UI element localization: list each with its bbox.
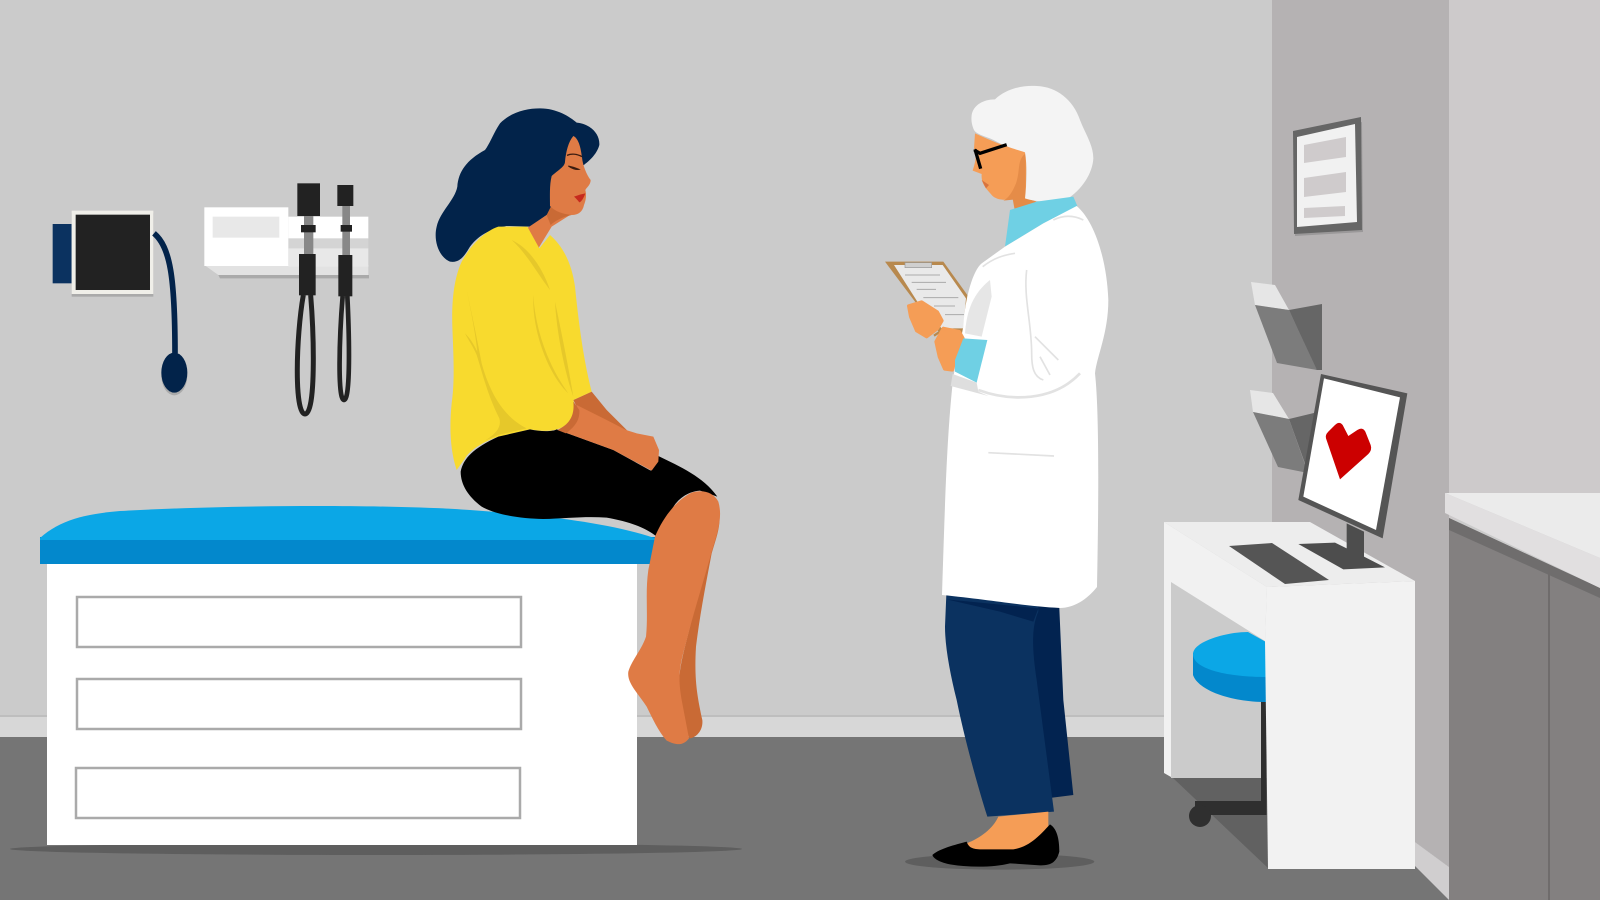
doctor trousers [945, 587, 1073, 817]
doctor collar [1005, 197, 1077, 247]
desk [1164, 522, 1415, 869]
patient seated on table [436, 108, 720, 744]
doctor neck [1012, 193, 1037, 212]
patient neck shadow [547, 205, 572, 225]
doctor face [973, 133, 1027, 200]
baseboard [0, 715, 1275, 737]
corner wall [1272, 0, 1449, 900]
desk shadow on floor [1173, 778, 1268, 868]
doctor hair [971, 86, 1093, 201]
doctor floor shadow [905, 854, 1094, 870]
doctor glasses [974, 145, 1007, 169]
otoscope [297, 183, 320, 414]
wall poster [1293, 117, 1363, 236]
exam table [10, 506, 742, 855]
monitor [1298, 374, 1407, 569]
blouse folds [465, 240, 573, 441]
patient arm and hand, near side [557, 402, 659, 471]
brochure holder: upper [1251, 282, 1322, 370]
inside of desk [1171, 582, 1266, 778]
keyboard [1229, 543, 1329, 584]
patient facial features [567, 154, 585, 202]
doctor cuff [955, 338, 987, 383]
patient arm, far side [573, 392, 627, 431]
doctor ear shadow [1003, 153, 1026, 201]
doctor foot [967, 812, 1048, 852]
counter cabinet [1445, 493, 1600, 900]
patient skirt [461, 429, 717, 537]
doctor upper body [885, 86, 1108, 608]
doctor lower body [905, 587, 1094, 870]
floor [0, 737, 1449, 900]
patient head [436, 108, 599, 262]
blood pressure cuff [53, 211, 187, 395]
pen [934, 329, 943, 336]
clipboard [885, 262, 967, 333]
stool [1189, 632, 1266, 827]
doctor shoe [932, 824, 1059, 867]
wall equipment [53, 183, 369, 414]
doctor hands [909, 302, 963, 370]
right wall [1449, 0, 1600, 520]
doctor lab coat [942, 206, 1108, 608]
patient legs [628, 491, 720, 744]
patient torso and arms [450, 227, 717, 537]
ophthalmoscope [337, 185, 353, 400]
wall diagnostic unit [204, 207, 369, 278]
icon: red heart on screen [1326, 423, 1371, 479]
patient blouse [450, 227, 592, 470]
patient face [550, 136, 591, 215]
doctor lips [982, 180, 989, 188]
patient neck [527, 215, 570, 248]
brochure holder: lower [1250, 390, 1318, 473]
patient hair [436, 108, 599, 262]
